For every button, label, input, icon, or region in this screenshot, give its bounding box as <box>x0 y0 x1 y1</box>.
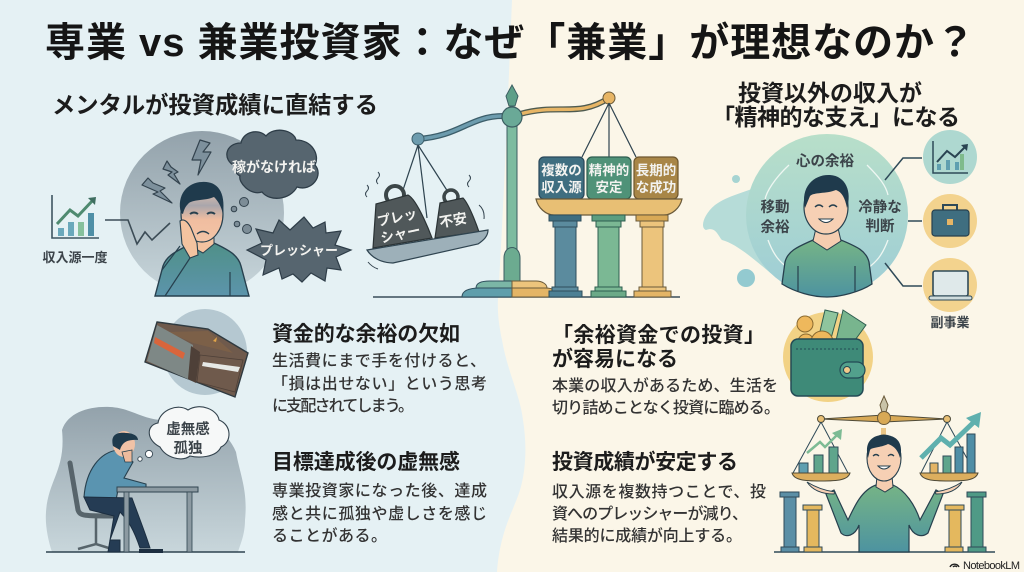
box: long-term success: 長期的 <box>636 162 676 178</box>
mind labels: 冷静な <box>858 198 902 216</box>
figure <box>84 450 146 500</box>
text: investing with spare funds: 本業の収入があるため、生活を <box>552 376 778 395</box>
label: income source: 収入源一度 <box>42 250 108 265</box>
heading: right: 「精神的な支え」になる <box>712 104 960 130</box>
illustration: happy man balancing <box>774 396 995 552</box>
ring arcs <box>765 165 888 268</box>
thought bubble <box>138 407 229 461</box>
thought bubble: 虚無感 <box>166 420 210 438</box>
icon: chart <box>923 130 977 184</box>
box: multiple income <box>539 157 584 199</box>
text: lack of funds: 資金的な余裕の欠如 <box>272 322 460 346</box>
illustration: calm man in circle <box>703 134 908 297</box>
icon: briefcase <box>923 194 977 248</box>
label: side job: 副事業 <box>930 315 970 330</box>
baseline <box>373 296 680 298</box>
heading: right: 投資以外の収入が <box>738 80 922 106</box>
mind labels: 心の余裕 <box>796 153 854 170</box>
illustration: central balance scale <box>366 85 682 297</box>
box: multiple income: 複数の <box>541 162 582 178</box>
scale top <box>880 396 888 412</box>
icon: laptop <box>923 258 977 312</box>
box: mental stability <box>587 157 631 199</box>
weight: anxiety: 不安 <box>438 210 468 230</box>
falling line <box>105 220 170 244</box>
mind labels: 余裕 <box>760 219 790 236</box>
box: long-term success <box>634 157 678 199</box>
cracked pan <box>367 230 488 263</box>
strings left <box>403 145 448 218</box>
right pan <box>920 412 981 481</box>
text: lack of funds: 「損は出せない」という思考 <box>272 375 487 393</box>
weight: pressure: シャー <box>379 223 422 246</box>
mind labels: 移動 <box>760 199 790 216</box>
thought dots <box>231 198 252 234</box>
thought bubble: 孤独 <box>174 440 203 457</box>
man <box>782 240 872 297</box>
pillar: green <box>591 215 626 297</box>
cloud: worry <box>227 130 318 198</box>
box: long-term success: な成功 <box>636 179 676 195</box>
illustration: income chart icon <box>42 195 108 265</box>
man <box>155 243 249 296</box>
pillar: blue <box>549 215 582 297</box>
text: investing with spare funds <box>552 324 780 417</box>
box: mental stability: 精神的 <box>589 162 629 178</box>
strings right <box>582 103 636 157</box>
strain marks <box>366 172 484 269</box>
lightning bolts <box>142 140 211 203</box>
box: multiple income: 収入源 <box>541 180 582 195</box>
text: emptiness after goal <box>272 450 487 545</box>
text: investing with spare funds: 切り詰めことなく投資に臨める。 <box>552 399 780 417</box>
desk <box>117 487 198 492</box>
text: lack of funds <box>272 322 487 415</box>
background: wavy blue left <box>0 0 525 572</box>
text: lack of funds: に支配されてしまう。 <box>272 397 414 415</box>
burst: pressure: プレッシャー <box>260 243 338 258</box>
text: stable performance: 資へのプレッシャーが減り、 <box>552 504 748 523</box>
connector lines <box>885 158 922 286</box>
mind labels: 判断 <box>866 218 895 235</box>
scale base <box>462 288 512 297</box>
cloud: worry: 稼がなければ <box>232 159 316 175</box>
burst: pressure <box>247 217 351 282</box>
box: mental stability: 安定 <box>596 180 623 195</box>
text: emptiness after goal: 専業投資家になった後、達成 <box>272 482 487 500</box>
heading: right <box>712 80 960 130</box>
title: 専業 vs 兼業投資家：なぜ「兼業」が理想なのか？ <box>45 21 975 65</box>
chair <box>70 463 116 516</box>
heading: left: メンタルが投資成績に直結する <box>52 91 378 118</box>
text: stable performance: 投資成績が安定する <box>552 450 738 474</box>
illustration: empty wallet <box>145 309 248 397</box>
illustration: full wallet <box>783 310 873 402</box>
platform <box>536 199 682 215</box>
illustration: stressed man <box>105 130 351 296</box>
weight: pressure <box>373 186 432 248</box>
weight: anxiety <box>435 190 479 238</box>
text: investing with spare funds: 「余裕資金での投資」 <box>552 324 765 347</box>
mind labels <box>760 153 902 236</box>
scale pole and beams <box>507 120 517 250</box>
weight: pressure: プレッ <box>376 206 418 229</box>
text: lack of funds: 生活費にまで手を付けると、 <box>272 352 486 370</box>
side pillars <box>780 492 986 552</box>
pillar: gold <box>634 215 671 297</box>
watermark: NotebookLM <box>963 560 1020 572</box>
text: investing with spare funds: が容易になる <box>552 347 678 371</box>
text: stable performance: 収入源を複数持つことで、投 <box>552 483 766 501</box>
text: stable performance: 結果的に成績が向上する。 <box>552 526 742 545</box>
text: emptiness after goal: 目標達成後の虚無感 <box>272 450 460 474</box>
text: emptiness after goal: ることがある。 <box>272 526 387 545</box>
text: stable performance <box>552 450 766 545</box>
text: emptiness after goal: 感と共に孤独や虚しさを感じ <box>272 505 487 523</box>
illustration: lonely man at desk <box>46 407 246 552</box>
body <box>826 485 943 552</box>
left pan <box>792 422 975 481</box>
